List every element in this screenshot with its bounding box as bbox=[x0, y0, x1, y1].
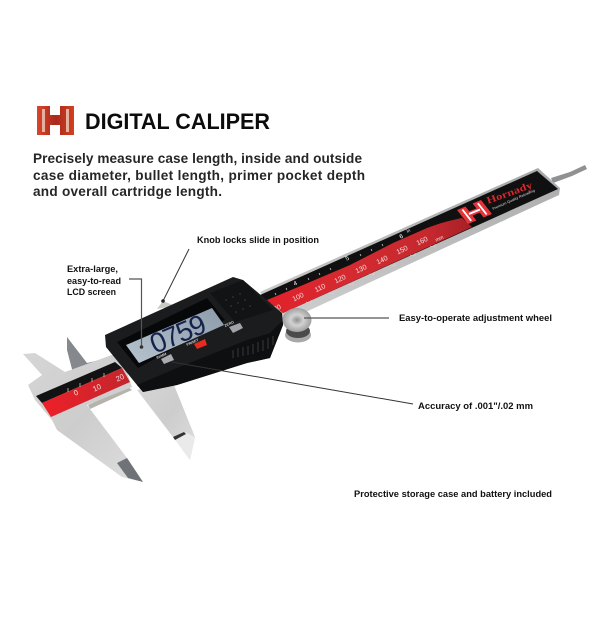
LCD screen bbox=[126, 308, 224, 363]
beam scale ticks and numbers: 90 bbox=[272, 304, 282, 313]
beam head and lower jaw: 0 bbox=[72, 388, 80, 398]
beam scale ticks and numbers: in bbox=[406, 227, 411, 234]
callout: LCD: easy-to-read bbox=[67, 276, 121, 287]
beam head and lower jaw bbox=[23, 352, 143, 482]
beam scale ticks and numbers: 100 bbox=[292, 292, 305, 303]
callout: knob bbox=[161, 235, 319, 303]
beam scale ticks and numbers: 140 bbox=[376, 255, 389, 266]
beam scale ticks and numbers: 6 bbox=[399, 233, 405, 241]
intro text: and overall cartridge length. bbox=[33, 184, 222, 199]
beam scale ticks and numbers: 150 bbox=[396, 245, 409, 256]
callout: knob: Knob locks slide in position bbox=[197, 235, 319, 246]
gray button right bbox=[229, 323, 243, 333]
button labels: PR/SET bbox=[186, 338, 200, 347]
beam logo: Hornady bbox=[485, 180, 534, 207]
depth rod end bbox=[551, 165, 587, 183]
button labels bbox=[156, 320, 235, 360]
beam scale ticks and numbers: 5 bbox=[345, 255, 351, 263]
beam scale ticks and numbers: 4 bbox=[293, 280, 299, 288]
callout: LCD: Extra-large, bbox=[67, 264, 118, 275]
caliper illustration bbox=[23, 165, 587, 482]
LCD reading: 0759 bbox=[145, 308, 211, 360]
red button bbox=[194, 339, 207, 349]
beam head and lower jaw: 10 bbox=[91, 382, 103, 394]
logo: Hornady H bbox=[37, 106, 74, 135]
grip ridges bbox=[233, 336, 273, 358]
intro text bbox=[33, 151, 365, 199]
note: storage case: Protective storage case and battery included bbox=[354, 489, 552, 500]
beam scale ticks and numbers: mm bbox=[435, 235, 445, 244]
button labels: ZERO bbox=[224, 320, 235, 328]
keypad area bbox=[210, 280, 273, 322]
callout: LCD bbox=[67, 264, 143, 349]
beam scale ticks and numbers bbox=[272, 227, 445, 313]
beam scale ticks and numbers: 160 bbox=[416, 236, 429, 247]
callout: accuracy: Accuracy of .001"/.02 mm bbox=[418, 401, 533, 412]
display bezel bbox=[117, 298, 225, 368]
beam head and lower jaw: 20 bbox=[114, 372, 126, 384]
depth rod underside bbox=[88, 387, 132, 409]
beam scale ticks and numbers: 130 bbox=[355, 264, 368, 275]
slider lower jaw bbox=[137, 380, 195, 460]
intro text: Precisely measure case length, inside and outside bbox=[33, 151, 362, 166]
inner upper jaw bbox=[67, 337, 110, 373]
callout: wheel: Easy-to-operate adjustment wheel bbox=[399, 313, 552, 324]
beam scale ticks and numbers: 120 bbox=[334, 274, 347, 285]
button labels: IN/MM bbox=[156, 352, 167, 360]
slider body bbox=[105, 277, 283, 392]
callout: LCD: LCD screen bbox=[67, 287, 116, 298]
gray button left bbox=[161, 354, 174, 364]
main beam bbox=[260, 168, 560, 323]
beam logo: Premium Quality Reloading bbox=[492, 189, 535, 211]
locking knob bbox=[157, 301, 175, 309]
intro text: case diameter, bullet length, primer pocket depth bbox=[33, 168, 365, 183]
callout: accuracy bbox=[172, 362, 533, 412]
adjustment wheel bbox=[282, 308, 312, 342]
beam scale ticks and numbers: 110 bbox=[314, 283, 327, 294]
title: DIGITAL CALIPER bbox=[85, 109, 270, 134]
beam logo bbox=[457, 180, 535, 224]
